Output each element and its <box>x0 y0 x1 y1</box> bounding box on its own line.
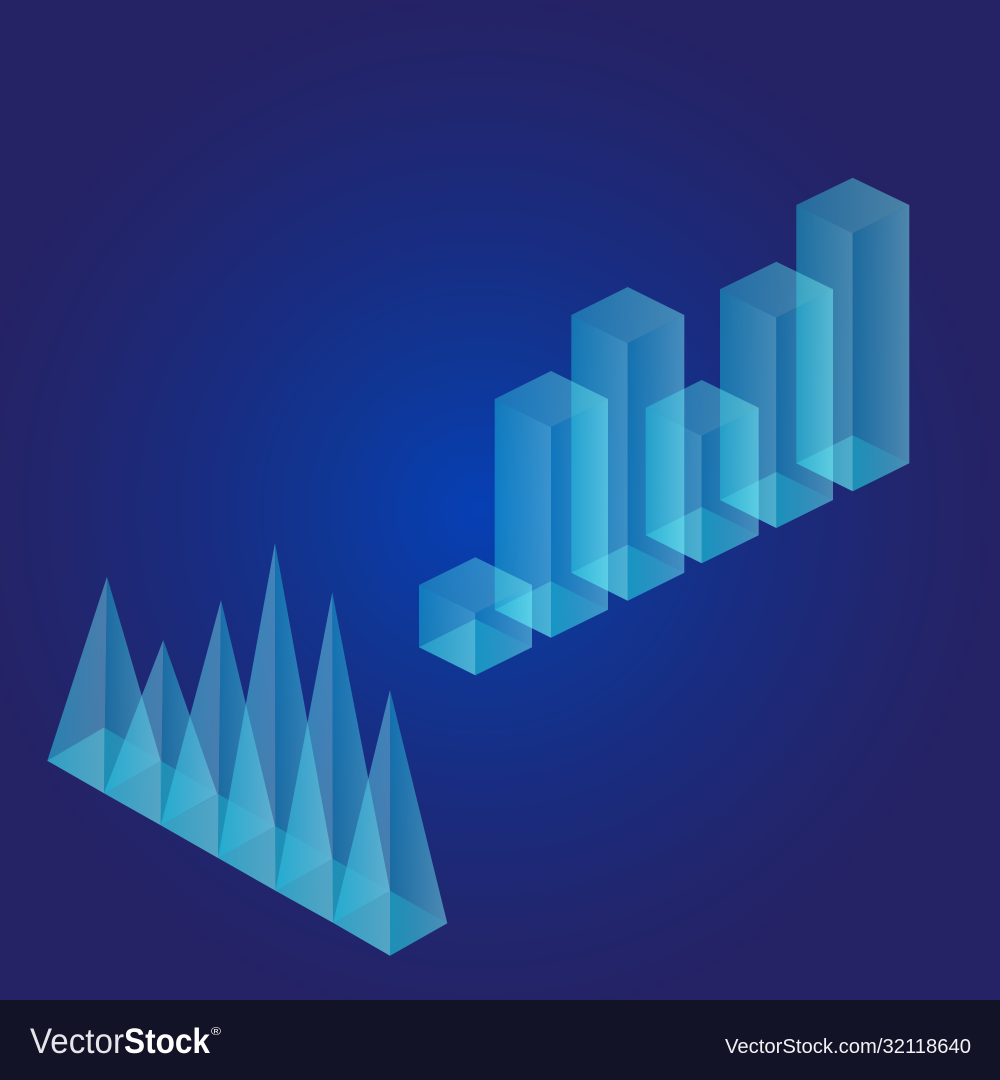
pyramid 3 <box>161 600 275 858</box>
bar 1 cube <box>419 557 532 675</box>
isometric pyramid chart <box>47 543 447 956</box>
pyramid 5 <box>276 592 390 923</box>
pyramid 1 <box>47 577 161 793</box>
pyramid 2 <box>104 640 217 825</box>
footer logo: ® <box>211 1026 221 1038</box>
bar 6 <box>796 178 909 491</box>
footer bar <box>0 1000 1000 1080</box>
footer image id: VectorStock.com/32118640 <box>725 1036 971 1058</box>
bar 2 <box>495 371 608 638</box>
pyramid 6 <box>333 690 447 956</box>
bar 4 <box>646 380 759 563</box>
isometric bar chart <box>419 178 909 675</box>
footer logo: Stock <box>124 1022 210 1061</box>
footer logo: Vector <box>30 1022 124 1061</box>
pyramid 4 <box>218 543 332 891</box>
footer logo <box>30 1022 221 1061</box>
bar 3 <box>571 287 684 601</box>
bar 5 <box>720 262 833 528</box>
